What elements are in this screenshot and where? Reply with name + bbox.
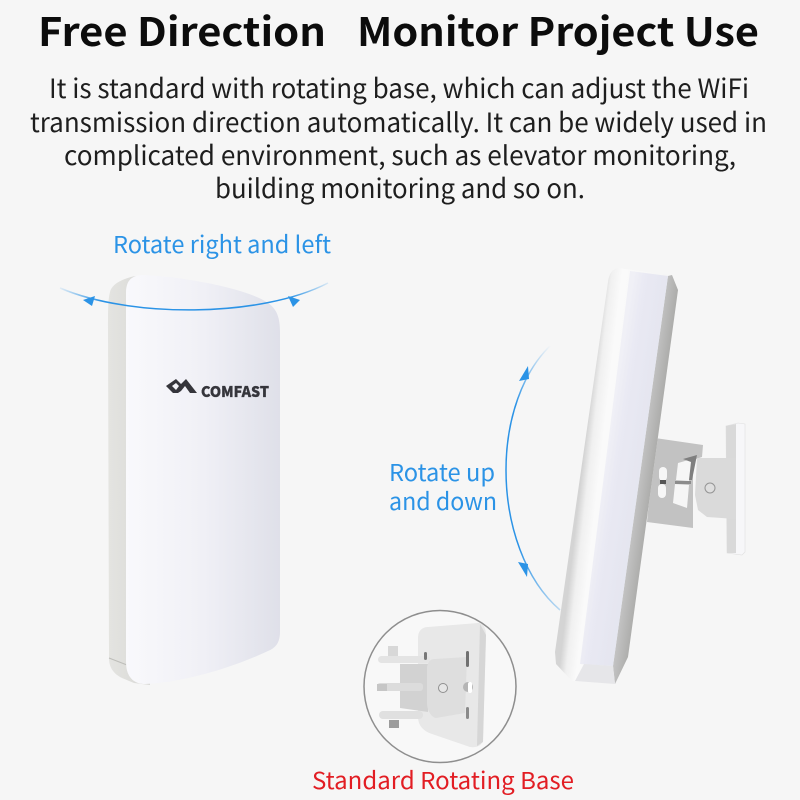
antenna housing [555, 268, 678, 684]
arrow: rotate right and left [60, 283, 328, 310]
device side panel [108, 276, 150, 685]
mounting plate [418, 623, 486, 747]
clamp discs [378, 656, 418, 663]
bracket body [647, 438, 703, 528]
hinge plate [427, 657, 467, 718]
device front face [126, 275, 280, 684]
label: rotate up and down: and down [389, 483, 497, 517]
bracket slots [659, 467, 667, 481]
hinge arm [695, 458, 736, 519]
description text block: It is standard with rotating base, which can adjust the WiFi [49, 67, 749, 106]
device: side view with bracket [555, 268, 745, 684]
wall plate [726, 423, 745, 555]
device logo [166, 379, 269, 402]
label: rotate right and left: Rotate right and left [113, 226, 331, 260]
pole clamp bolts [388, 646, 398, 656]
inset: standard rotating base [364, 610, 516, 762]
title: Monitor Project Use [357, 2, 759, 58]
label: rotate up and down: Rotate up [389, 454, 495, 488]
title: Free Direction [38, 2, 326, 58]
bracket window [676, 459, 692, 481]
housing face [580, 271, 668, 666]
device logo: COMFAST [201, 381, 269, 402]
description text block: complicated environment, such as elevator monitoring, [64, 134, 736, 173]
arrow: rotate up and down [506, 344, 560, 610]
description text block [30, 67, 767, 206]
title [38, 2, 759, 58]
description text block: building monitoring and so on. [215, 167, 585, 206]
description text block: transmission direction automatically. It can be widely used in [30, 101, 767, 140]
plate slots and hole [466, 651, 469, 667]
label: standard rotating base: Standard Rotating Base [312, 762, 574, 796]
housing grey side [613, 275, 678, 684]
label: rotate up and down [389, 454, 497, 517]
device: front view [108, 275, 280, 685]
